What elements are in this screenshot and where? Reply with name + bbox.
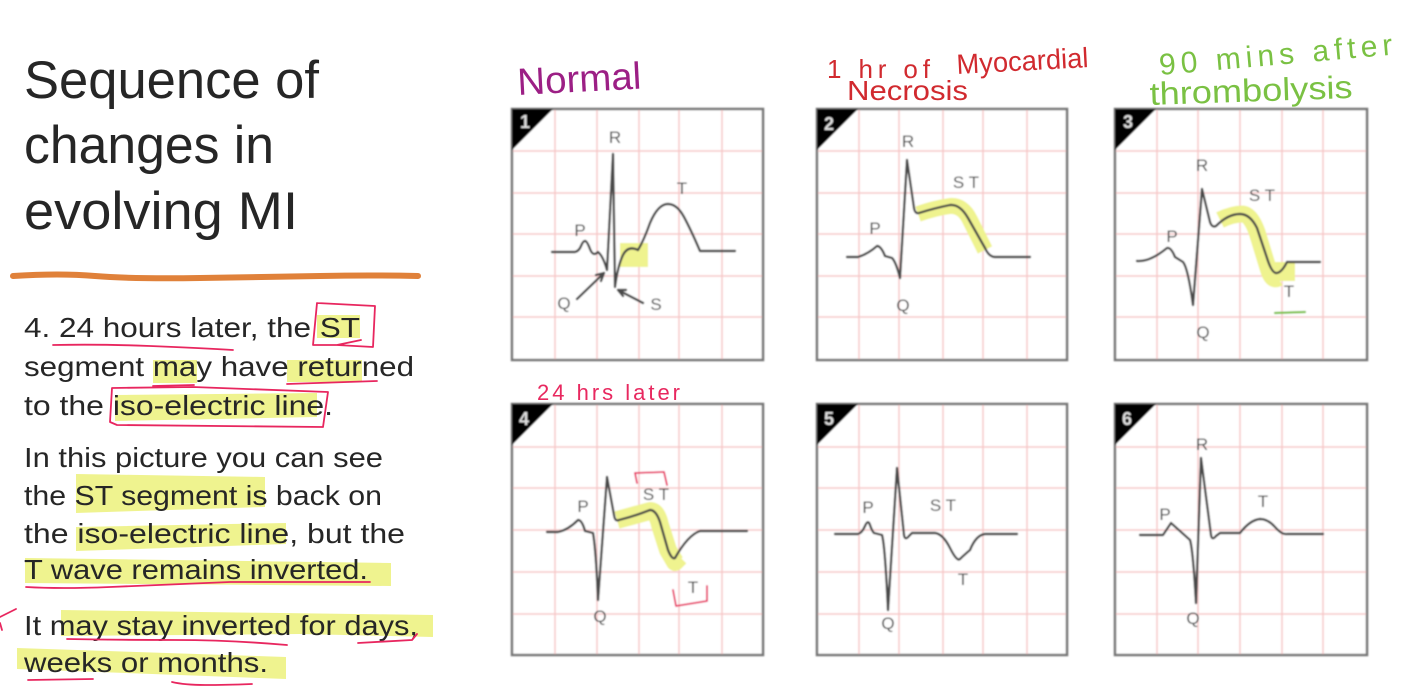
panel 6: ECG with normalised T wave xyxy=(1115,404,1367,655)
title xyxy=(24,51,319,241)
text block: explanation with highlights and annotations xyxy=(0,303,433,685)
panel 5: ECG with inverted T wave: 5 xyxy=(824,409,834,429)
panel 1: normal ECG: P xyxy=(574,221,586,240)
handwritten label: 90 mins after thrombolysis xyxy=(1149,29,1394,112)
panel 5: ECG with inverted T wave: T xyxy=(958,570,968,589)
title: changes in xyxy=(24,116,274,175)
panel 1: normal ECG: Q xyxy=(557,294,571,313)
panel 4: 24 hrs later ECG xyxy=(512,404,763,655)
title: Sequence of xyxy=(24,51,319,110)
panel 1: normal ECG: T xyxy=(677,179,687,198)
panel 6: ECG with normalised T wave: Q xyxy=(1186,609,1200,628)
panel 2: 1 hr of myocardial necrosis ECG: Q xyxy=(896,296,910,315)
paragraph 1 xyxy=(24,312,414,421)
yellow text highlights xyxy=(17,315,433,679)
panel 6: ECG with normalised T wave: T xyxy=(1258,492,1268,511)
pink pen annotations xyxy=(0,303,417,685)
paragraph 3: weeks or months. xyxy=(23,647,268,678)
panel 3: 90 mins after thrombolysis ECG: 3 xyxy=(1123,112,1133,132)
handwritten label: 1 hr of Myocardial Necrosis xyxy=(827,42,1089,106)
panel 5: ECG with inverted T wave: P xyxy=(862,498,874,517)
paragraph 3 xyxy=(23,610,418,678)
panel 3: 90 mins after thrombolysis ECG: Q xyxy=(1196,323,1210,342)
panel 5: ECG with inverted T wave: S T xyxy=(930,496,956,515)
panel 3: 90 mins after thrombolysis ECG: P xyxy=(1166,227,1178,246)
orange title underline xyxy=(13,274,418,278)
handwritten label: 90 mins after thrombolysis: thrombolysis xyxy=(1149,69,1353,112)
panel 4: 24 hrs later ECG: Q xyxy=(593,607,607,626)
panel 4: 24 hrs later ECG: S T xyxy=(643,485,669,504)
panel 4: 24 hrs later ECG: 4 xyxy=(519,409,529,429)
panel 3: 90 mins after thrombolysis ECG: S T xyxy=(1249,186,1275,205)
panel 2: 1 hr of myocardial necrosis ECG: P xyxy=(869,219,881,238)
panel 6: ECG with normalised T wave: R xyxy=(1196,435,1208,454)
paragraph 2: the iso-electric line, but the xyxy=(24,518,405,549)
panel 2: 1 hr of myocardial necrosis ECG: R xyxy=(902,132,914,151)
handwritten label: Normal: Normal xyxy=(516,56,642,104)
panel 4: 24 hrs later ECG: T xyxy=(688,578,698,597)
panel 2: 1 hr of myocardial necrosis ECG: S T xyxy=(953,173,979,192)
paragraph 2: the ST segment is back on xyxy=(24,480,382,511)
panel 2: 1 hr of myocardial necrosis ECG xyxy=(817,109,1067,360)
panel 3: 90 mins after thrombolysis ECG: R xyxy=(1196,156,1208,175)
paragraph 2 xyxy=(24,442,405,585)
panel 3: 90 mins after thrombolysis ECG: T xyxy=(1284,282,1294,301)
paragraph 1: 4. 24 hours later, the ST xyxy=(24,312,360,343)
panel 1: normal ECG: R xyxy=(609,128,621,147)
handwritten label: 1 hr of Myocardial Necrosis: Myocardial xyxy=(956,42,1089,80)
handwritten label: 24 hrs later: 24 hrs later xyxy=(537,380,680,405)
handwritten label: 1 hr of Myocardial Necrosis: Necrosis xyxy=(847,75,968,106)
panel 5: ECG with inverted T wave: Q xyxy=(881,614,895,633)
panel 4: 24 hrs later ECG: P xyxy=(577,497,589,516)
title: evolving MI xyxy=(24,182,298,241)
panel 5: ECG with inverted T wave xyxy=(817,404,1067,655)
panel 1: normal ECG: S xyxy=(650,295,662,314)
paragraph 2: T wave remains inverted. xyxy=(24,554,368,585)
panel 6: ECG with normalised T wave: 6 xyxy=(1122,409,1132,429)
panel 1: normal ECG xyxy=(512,109,763,360)
panel 6: ECG with normalised T wave: P xyxy=(1159,505,1171,524)
paragraph 3: It may stay inverted for days, xyxy=(24,610,418,641)
panel 2: 1 hr of myocardial necrosis ECG: 2 xyxy=(824,114,834,134)
paragraph 2: In this picture you can see xyxy=(24,442,383,473)
paragraph 1: segment may have returned xyxy=(24,351,414,382)
handwritten label: 90 mins after thrombolysis: 90 mins after xyxy=(1158,29,1394,82)
paragraph 1: to the iso-electric line. xyxy=(24,390,333,421)
handwritten label: 1 hr of Myocardial Necrosis: 1 hr of xyxy=(827,54,931,84)
panel 3: 90 mins after thrombolysis ECG xyxy=(1115,109,1367,360)
panel 1: normal ECG: 1 xyxy=(520,112,530,132)
